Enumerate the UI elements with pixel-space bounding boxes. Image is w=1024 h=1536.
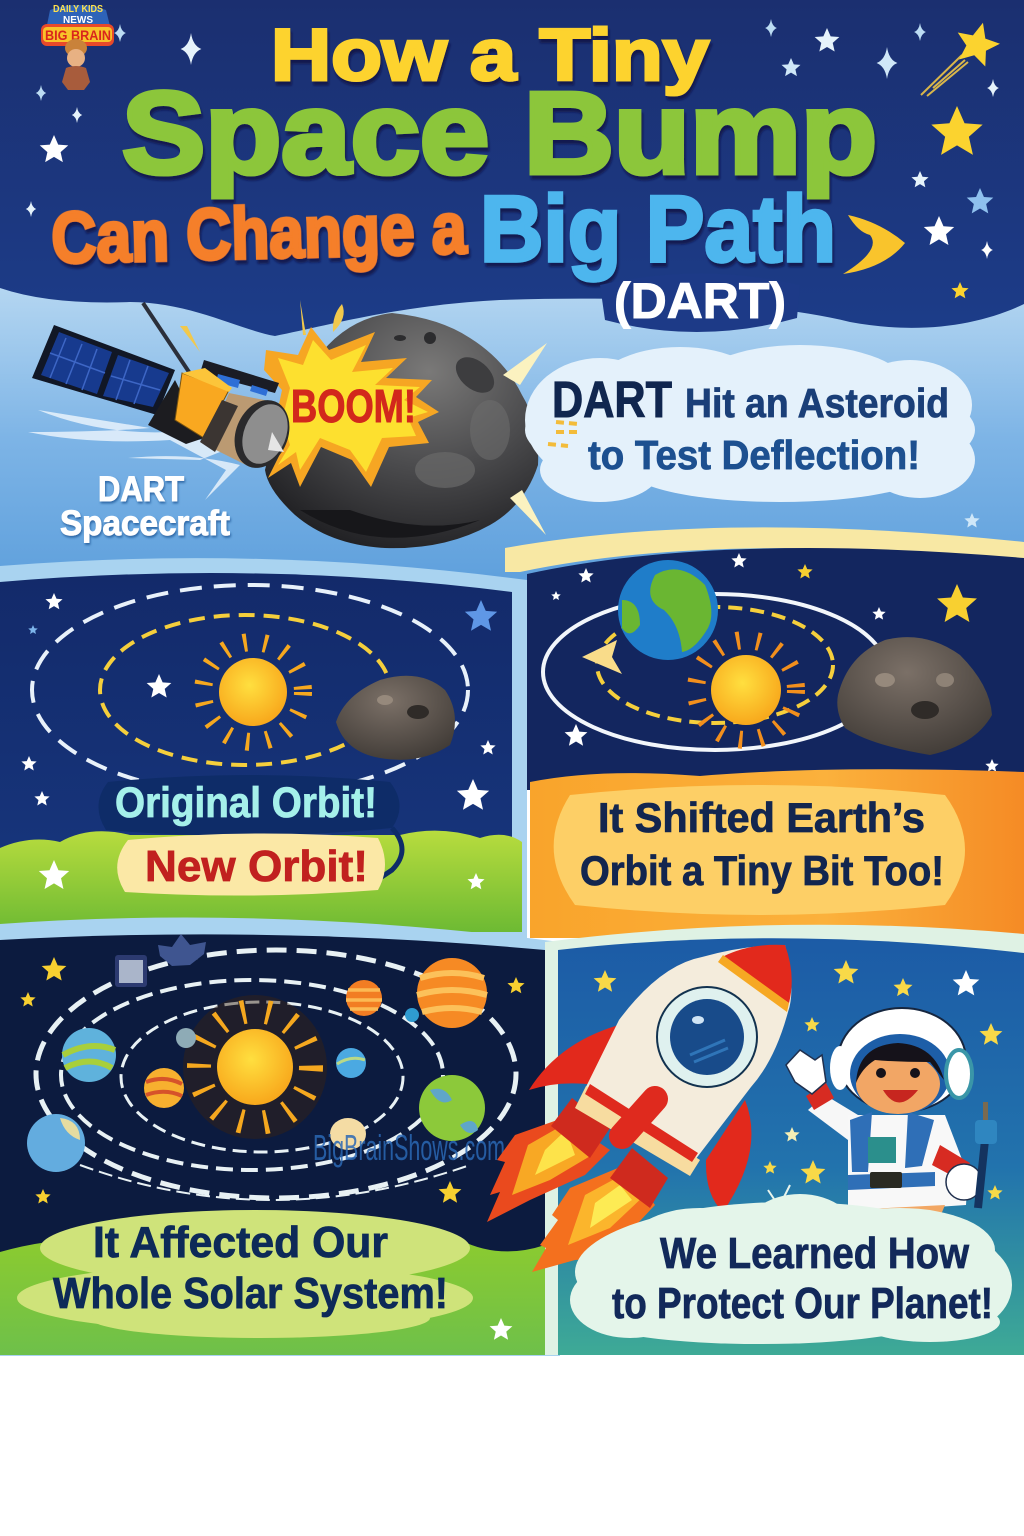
title: How a Tiny bbox=[271, 15, 709, 96]
icon: BOOM burst bbox=[264, 327, 439, 487]
callout: Earth's orbit bbox=[554, 785, 965, 915]
solar stars bbox=[20, 957, 525, 1203]
icon: astronaut bbox=[786, 1008, 997, 1222]
icon: sun bbox=[696, 640, 796, 740]
icon: asteroid bbox=[837, 637, 992, 755]
icon: DART spacecraft bbox=[32, 303, 299, 476]
callout: whole solar system: It Affected Our bbox=[93, 1218, 388, 1267]
rocket flames bbox=[487, 1118, 655, 1272]
pill: (DART): (DART) bbox=[614, 273, 786, 329]
callout: Earth's orbit: Orbit a Tiny Bit Too! bbox=[580, 847, 944, 894]
callout: whole solar system bbox=[17, 1210, 473, 1338]
callout: DART hit an asteroid: Hit an Asteroid bbox=[685, 380, 949, 426]
logo character bbox=[62, 39, 90, 90]
icon: crescent comet bbox=[843, 215, 905, 274]
rocket window bbox=[657, 987, 757, 1087]
logo: Daily Kids News Big Brain: NEWS bbox=[63, 15, 93, 26]
protect stars bbox=[594, 960, 1003, 1199]
label: DART Spacecraft: Spacecraft bbox=[60, 504, 230, 543]
callout: DART hit an asteroid: DART bbox=[552, 371, 672, 428]
icon: impact rays bbox=[180, 300, 547, 535]
panel: Earth's orbit shift bbox=[505, 527, 1024, 938]
ground bbox=[0, 1239, 545, 1355]
label: original orbit: Original Orbit! bbox=[115, 779, 377, 827]
callout: DART hit an asteroid bbox=[525, 345, 975, 502]
rocket nose bbox=[722, 945, 792, 1003]
title: Big Path bbox=[480, 176, 836, 281]
chart: new orbit ring bbox=[100, 615, 390, 765]
rocket nozzles bbox=[551, 1098, 610, 1158]
orange band bbox=[530, 769, 1024, 938]
label: DART Spacecraft bbox=[60, 470, 230, 543]
arc connector bbox=[380, 828, 402, 878]
label: new orbit: New Orbit! bbox=[145, 842, 368, 891]
chart: yellow dashed orbit bbox=[597, 607, 833, 723]
icon: planets bbox=[27, 958, 487, 1172]
icon: Earth bbox=[618, 560, 718, 660]
orbit stars bbox=[21, 593, 497, 810]
callout: protect our planet: We Learned How bbox=[660, 1229, 970, 1278]
panel: orbit change bbox=[0, 558, 527, 940]
icon: antenna sparkles bbox=[768, 1185, 790, 1205]
callout: whole solar system: Whole Solar System! bbox=[53, 1269, 448, 1318]
header stars bbox=[26, 19, 999, 298]
callout: protect our planet bbox=[570, 1194, 1012, 1344]
panel: header night sky bbox=[0, 0, 1024, 350]
chart: orbit rings bbox=[36, 950, 516, 1200]
callout: DART hit an asteroid: to Test Deflection! bbox=[588, 432, 920, 478]
logo: Daily Kids News Big Brain bbox=[41, 4, 114, 90]
icon: rocket bbox=[487, 945, 792, 1272]
label: DART Spacecraft: DART bbox=[98, 470, 184, 509]
icon: orbit arrow bbox=[582, 640, 622, 674]
shift stars bbox=[551, 553, 999, 772]
astronaut tool bbox=[975, 1102, 997, 1208]
watermark: BigBrainShows.com bbox=[313, 1127, 505, 1168]
icon: asteroid bbox=[265, 313, 538, 548]
callout: Earth's orbit: It Shifted Earth’s bbox=[598, 794, 925, 841]
icon: motion streaks bbox=[28, 410, 240, 500]
icon: BOOM burst: BOOM! bbox=[291, 380, 416, 432]
label: new orbit bbox=[117, 833, 385, 896]
panel: DART impact bbox=[0, 273, 1024, 590]
ground bbox=[0, 831, 522, 932]
logo: Daily Kids News Big Brain: BIG BRAIN bbox=[45, 27, 111, 43]
panel: protect our planet bbox=[487, 925, 1024, 1355]
rocket base bands bbox=[575, 1086, 700, 1176]
rocket body bbox=[581, 945, 791, 1160]
icon: satellites bbox=[115, 934, 206, 987]
icon: sun bbox=[183, 995, 327, 1139]
icon: small asteroid bbox=[336, 676, 455, 760]
rocket fins bbox=[529, 1023, 626, 1090]
panel: solar system bbox=[0, 918, 560, 1356]
icon: shooting star bbox=[921, 17, 1004, 96]
logo: Daily Kids News Big Brain: DAILY KIDS bbox=[53, 4, 103, 15]
title bbox=[50, 15, 877, 281]
icon: sun bbox=[203, 642, 303, 742]
title: Space Bump bbox=[122, 68, 877, 198]
chart: white orbit bbox=[543, 594, 887, 750]
chart: original orbit ring bbox=[32, 585, 468, 795]
title: Can Change a bbox=[50, 189, 468, 279]
